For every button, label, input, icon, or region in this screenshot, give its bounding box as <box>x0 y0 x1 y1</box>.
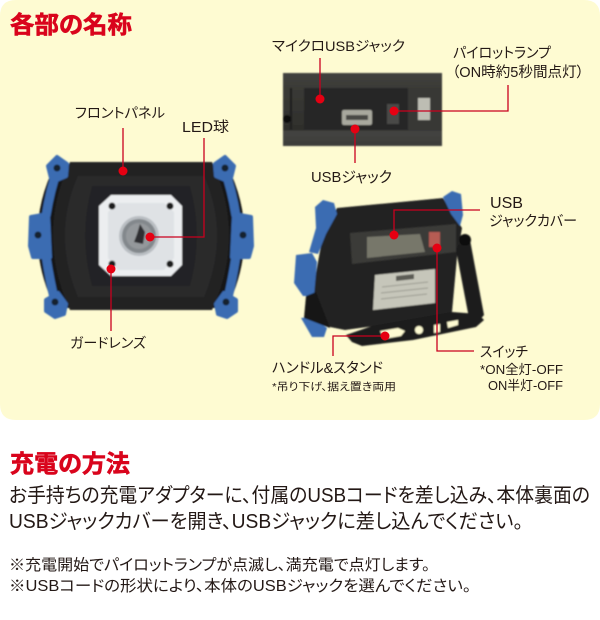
pilot lamp windows <box>387 104 399 124</box>
left lower bumper <box>301 317 327 337</box>
LED lens <box>119 216 159 256</box>
lamp front panel <box>53 162 229 310</box>
silver lens plate <box>99 195 182 276</box>
front view of work light <box>30 157 252 317</box>
switch <box>429 232 440 247</box>
callout: switch: *ON全灯-OFF <box>480 362 563 377</box>
right top bumper <box>443 191 463 226</box>
right blue bumper <box>215 157 252 317</box>
callout: USB jack: USBジャック <box>311 169 392 186</box>
callout: USB jack cover: USB <box>490 195 523 212</box>
left blue bumper <box>30 157 67 317</box>
callout: USB jack cover: ジャックカバー <box>489 213 577 230</box>
stand arm <box>456 238 484 322</box>
callout: LED bulb <box>146 119 230 242</box>
left middle bumper <box>294 253 317 296</box>
callout: handle and stand <box>272 332 396 393</box>
control panel photo <box>283 73 442 146</box>
text block: notes: ※USBコードの形状により、本体のUSBジャックを選んでください。 <box>9 577 471 595</box>
text block: charging instructions: USBジャックカバーを開き、USBジャックに差し込んでください。 <box>9 510 523 533</box>
USB socket <box>342 110 372 125</box>
stand bar <box>346 312 484 346</box>
callout: guard lens <box>70 264 147 351</box>
callout: pilot lamp <box>390 45 584 116</box>
bumper screw holes <box>34 164 246 306</box>
knob <box>459 234 471 246</box>
switch <box>418 98 430 120</box>
screw <box>283 115 291 123</box>
heading: how to charge: 充電の方法 <box>10 451 130 478</box>
callout: front panel: フロントパネル <box>75 105 165 121</box>
outer black rim <box>38 165 244 308</box>
callout: switch: ON半灯-OFF <box>488 378 563 393</box>
callout: pilot lamp: パイロットランプ <box>453 45 552 62</box>
callout: guard lens: ガードレンズ <box>70 335 147 351</box>
callout: micro USB jack <box>272 38 405 104</box>
callout: handle and stand: *吊り下げ、据え置き両用 <box>272 380 396 393</box>
callout: handle and stand: ハンドル&スタンド <box>272 360 383 377</box>
callout: USB jack cover <box>390 195 577 240</box>
rear view of work light <box>294 191 484 346</box>
left top bumper <box>309 200 337 254</box>
plate screws <box>108 202 174 268</box>
callout: front panel <box>75 105 165 176</box>
callout: switch <box>432 244 563 393</box>
callout: switch: スイッチ <box>480 345 528 361</box>
text block: notes <box>9 556 471 595</box>
body <box>312 198 462 330</box>
USB jack cover <box>367 234 425 258</box>
text block: notes: ※充電開始でパイロットランプが点滅し、満充電で点灯します。 <box>9 556 430 574</box>
callout: pilot lamp: （ON時約5秒間点灯） <box>452 64 584 81</box>
heading: parts names: 各部の名称 <box>10 11 132 39</box>
text block: charging instructions <box>9 484 590 533</box>
panel: parts names <box>0 0 600 420</box>
stand holes <box>380 328 405 339</box>
callout: micro USB jack: マイクロUSBジャック <box>272 38 405 54</box>
rating label <box>373 269 435 310</box>
callout: LED bulb: LED球 <box>182 119 230 136</box>
callout: USB jack <box>311 124 392 186</box>
upper recess <box>350 224 456 264</box>
